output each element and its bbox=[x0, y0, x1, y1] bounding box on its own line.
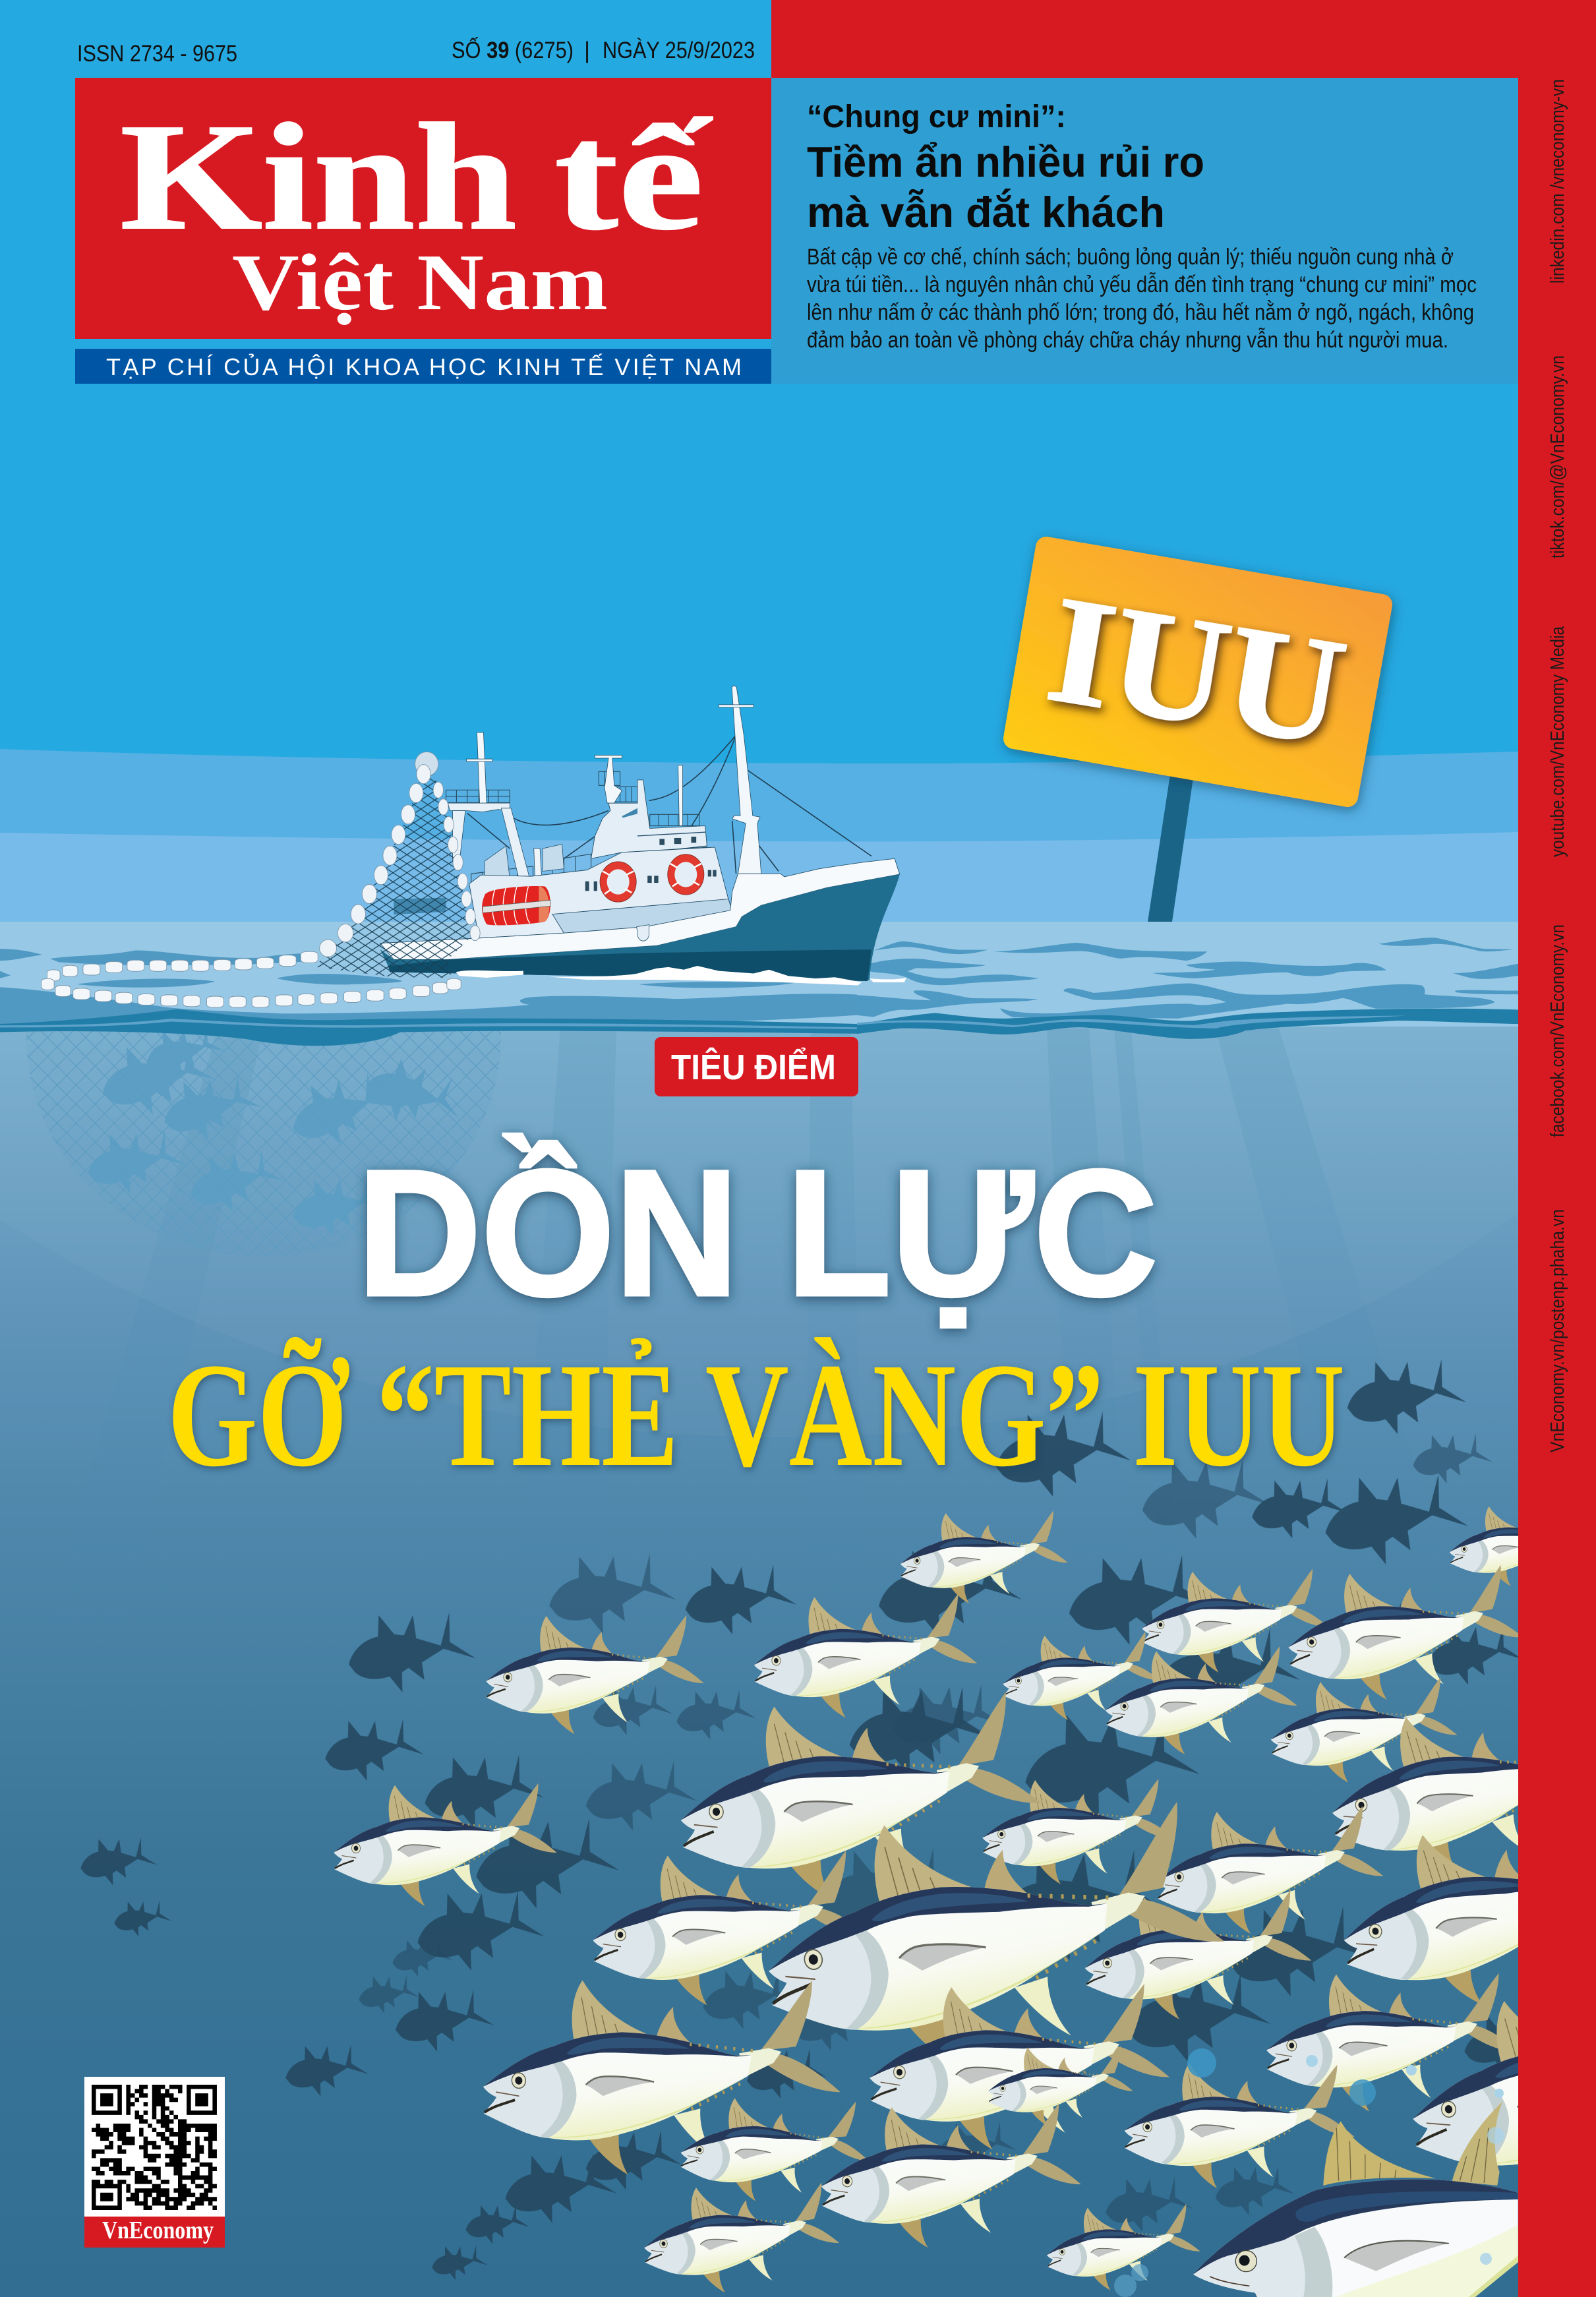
red life raft canister bbox=[482, 886, 550, 926]
float line on water bbox=[42, 951, 461, 1007]
wheelhouse bbox=[591, 780, 707, 858]
middle sea band bbox=[0, 832, 1518, 923]
sign: IUU bbox=[1014, 547, 1382, 922]
sign board bbox=[1014, 547, 1382, 796]
red top band bbox=[771, 0, 1596, 78]
rigging wires bbox=[467, 735, 872, 874]
large tuna at bottom right bbox=[1193, 2101, 1518, 2297]
tagline text: TẠP CHÍ CỦA HỘI KHOA HỌC KINH TẾ VIỆT NAM bbox=[106, 353, 742, 380]
social links on red strip: linkedin.com /vneconomy-vn bbox=[1547, 79, 1568, 283]
teaser headline bbox=[807, 138, 1204, 236]
back bbox=[1193, 2180, 1518, 2275]
light rays under water bbox=[40, 1029, 1450, 1648]
bow wave foam bbox=[456, 966, 906, 985]
railings bbox=[446, 771, 699, 884]
net floats bbox=[320, 752, 480, 957]
school of tuna bbox=[325, 1491, 1596, 2297]
body bbox=[1193, 2180, 1518, 2297]
main title: DỒN LỰC: DỒN LỰC bbox=[357, 1133, 1158, 1333]
underwater net with trapped fish bbox=[26, 1017, 501, 1257]
QR code with VnEconomy label bbox=[84, 2077, 225, 2248]
issue information bbox=[77, 37, 755, 67]
ISSN: ISSN 2734 - 9675 bbox=[77, 41, 237, 67]
head bbox=[1193, 2227, 1332, 2297]
pectoral fin bbox=[1344, 2241, 1449, 2271]
life ring bbox=[668, 854, 704, 895]
life ring bbox=[600, 862, 636, 902]
air bubbles bbox=[1114, 2048, 1504, 2297]
panel: cover story teaser bbox=[771, 78, 1518, 384]
social links on red strip: youtube.com/VnEconomy Media bbox=[1547, 626, 1568, 857]
teaser body: đảm bảo an toàn về phòng cháy chữa cháy nhưng vẫn thu hút người mua. bbox=[807, 328, 1448, 353]
mouth line bbox=[1210, 2277, 1249, 2286]
red right strip bbox=[1518, 0, 1596, 2297]
white hull band bbox=[380, 858, 900, 959]
logo background bbox=[75, 78, 771, 339]
gantry bbox=[448, 803, 529, 876]
dorsal fin bbox=[1323, 2121, 1436, 2186]
logo: tế: tế bbox=[554, 92, 713, 262]
sea waves right side bbox=[857, 938, 1519, 1039]
second dorsal fin bbox=[1452, 2101, 1503, 2186]
teaser body: Bất cập về cơ chế, chính sách; buông lỏng quản lý; thiếu nguồn cung nhà ở bbox=[807, 245, 1454, 270]
teaser body bbox=[807, 245, 1477, 353]
issue date: NGÀY 25/9/2023 bbox=[603, 38, 755, 63]
mesh panel bbox=[394, 898, 446, 914]
logo: Kinh: Kinh bbox=[120, 92, 517, 262]
section badge: TIÊU ĐIỂM bbox=[655, 1037, 858, 1096]
belly bbox=[1336, 2224, 1518, 2297]
fishing boat with net bbox=[316, 686, 906, 985]
issue number: SỐ 39 (6275) bbox=[452, 37, 574, 63]
teaser body: lên như nấm ở các thành phố lớn; trong đó, hầu hết nằm ở ngõ, ngách, không bbox=[807, 300, 1474, 325]
funnels bbox=[485, 846, 510, 881]
sea waves left side bbox=[0, 949, 857, 1046]
far sea band bbox=[0, 749, 1518, 923]
large lighter arc under water bbox=[0, 1027, 1518, 1437]
logo: Việt Nam: Việt Nam bbox=[232, 238, 608, 327]
QR label: VnEconomy bbox=[102, 2217, 214, 2244]
near sea surface bbox=[0, 922, 1518, 1037]
eye bbox=[1235, 2251, 1256, 2272]
badge text: TIÊU ĐIỂM bbox=[671, 1047, 836, 1087]
separator: | bbox=[584, 38, 590, 63]
masts bbox=[467, 686, 761, 874]
teaser headline: Tiềm ẩn nhiều rủi ro bbox=[807, 138, 1204, 186]
social links on red strip: VnEconomy.vn/postenp.phaha.vn bbox=[1547, 1209, 1568, 1452]
shadow fish in the background bbox=[77, 1350, 1562, 2283]
social links on red strip: tiktok.com/@VnEconomy.vn bbox=[1547, 355, 1568, 558]
masthead logo bbox=[75, 78, 771, 339]
sign text: IUU bbox=[1038, 564, 1355, 778]
lower hull shading bbox=[388, 949, 872, 981]
sign post bbox=[1148, 775, 1193, 922]
teaser headline: mà vẫn đắt khách bbox=[807, 188, 1165, 236]
teaser body: vừa túi tiền... là nguyên nhân chủ yếu dẫn đến tình trạng “chung cư mini” mọc bbox=[807, 272, 1477, 297]
hull bbox=[380, 874, 900, 981]
fishing net bbox=[316, 754, 471, 978]
tagline bar bbox=[75, 349, 771, 384]
social links on red strip bbox=[1547, 79, 1568, 1452]
teaser kicker: “Chung cư mini”: bbox=[807, 100, 1066, 134]
QR modules bbox=[92, 2087, 217, 2208]
deck house bbox=[469, 847, 732, 938]
social links on red strip: facebook.com/VnEconomy.vn bbox=[1547, 924, 1568, 1137]
underwater background bbox=[0, 1027, 1518, 2297]
